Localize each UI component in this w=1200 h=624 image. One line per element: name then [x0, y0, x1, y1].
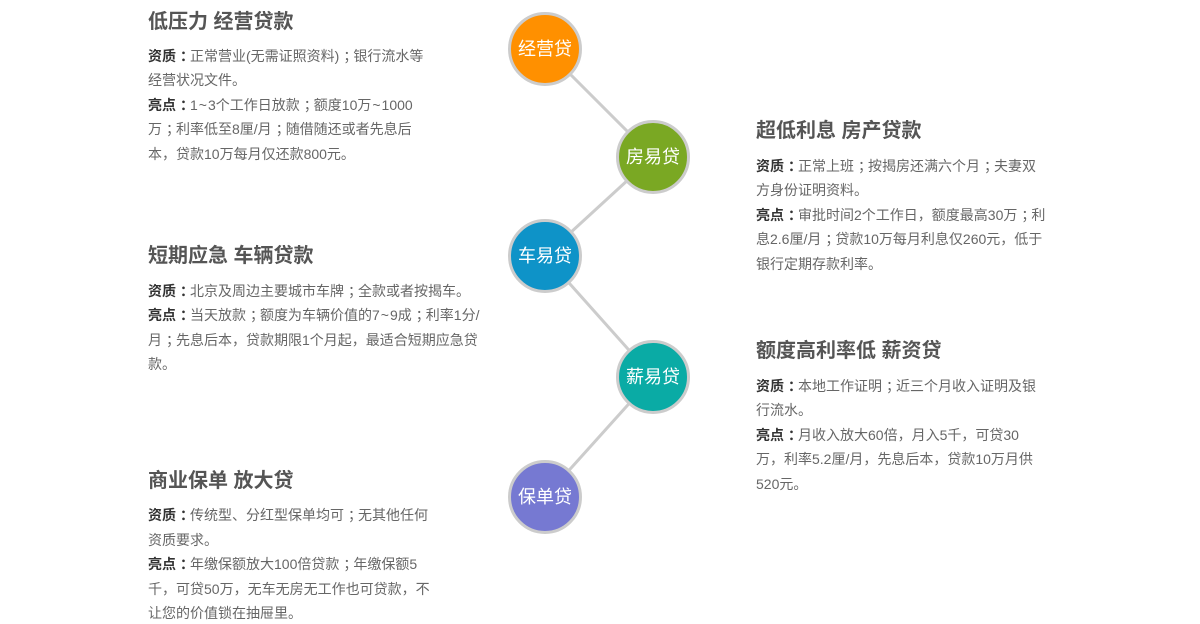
panel: 房产贷款 [756, 120, 1045, 272]
panel: 经营贷款: 资质 ：正常营业(无需证照资料) ；银行流水等 [148, 48, 423, 64]
panel: 房产贷款: 银行定期存款利率。 [756, 256, 882, 272]
node: 房易贷 [616, 120, 690, 194]
panel: 放大贷: 亮点 ：年缴保额放大100倍贷款 ；年缴保额5 [148, 556, 417, 572]
node: 保单贷 [508, 460, 582, 534]
panel: 薪资贷: 万，利率5.2厘/月，先息后本，贷款10万月供 [756, 451, 1033, 467]
panel: 房产贷款: 超低利息 房产贷款 [756, 120, 922, 142]
panel: 放大贷: 资质要求。 [148, 532, 218, 548]
panel: 房产贷款: 方身份证明资料。 [756, 182, 868, 198]
panel: 车辆贷款: 资质 ：北京及周边主要城市车牌 ；全款或者按揭车。 [148, 282, 470, 298]
node: 车易贷 [508, 219, 582, 293]
node: 经营贷: 经营贷 [518, 39, 572, 59]
panel: 薪资贷 [756, 340, 1036, 492]
panel: 放大贷: 千，可贷50万，无车无房无工作也可贷款，不 [148, 580, 430, 596]
node: 车易贷: 车易贷 [518, 246, 572, 266]
panel: 薪资贷: 520元。 [756, 476, 807, 492]
panel: 放大贷: 让您的价值锁在抽屉里。 [148, 605, 302, 621]
panel: 房产贷款: 亮点 ：审批时间2个工作日，额度最高30万 ；利 [756, 206, 1045, 222]
panel: 经营贷款: 本，贷款10万每月仅还款800元。 [148, 146, 355, 162]
panel: 车辆贷款: 短期应急 车辆贷款 [148, 245, 314, 267]
panel: 车辆贷款: 亮点 ：当天放款 ；额度为车辆价值的7~9成 ；利率1分/ [148, 307, 479, 323]
node: 薪易贷: 薪易贷 [626, 367, 680, 387]
node: 薪易贷 [616, 340, 690, 414]
panel: 经营贷款: 万 ；利率低至8厘/月 ；随借随还或者先息后 [148, 121, 412, 137]
panel: 经营贷款: 经营状况文件。 [148, 72, 246, 88]
node: 保单贷: 保单贷 [518, 487, 572, 507]
panel: 放大贷: 商业保单 放大贷 [148, 470, 294, 492]
node: 经营贷 [508, 12, 582, 86]
panel: 经营贷款 [148, 10, 423, 162]
panel: 薪资贷: 亮点 ：月收入放大60倍，月入5千，可贷30 [756, 426, 1019, 442]
panel: 房产贷款: 息2.6厘/月 ；贷款10万每月利息仅260元，低于 [756, 231, 1042, 247]
panel: 车辆贷款: 月 ；先息后本，贷款期限1个月起，最适合短期应急贷 [148, 332, 478, 348]
panel: 房产贷款: 资质 ：正常上班 ；按揭房还满六个月 ；夫妻双 [756, 158, 1036, 174]
panel: 薪资贷: 额度高利率低 薪资贷 [756, 340, 942, 362]
node: 房易贷: 房易贷 [626, 147, 680, 167]
panel: 车辆贷款 [148, 244, 480, 372]
panel: 经营贷款: 低压力 经营贷款 [148, 11, 294, 33]
panel: 车辆贷款: 款。 [148, 356, 176, 372]
panel: 放大贷 [148, 470, 430, 621]
panel: 放大贷: 资质 ：传统型、分红型保单均可 ；无其他任何 [148, 507, 428, 523]
panel: 经营贷款: 亮点 ：1~3个工作日放款 ；额度10万~1000 [148, 96, 413, 112]
panel: 薪资贷: 资质 ：本地工作证明 ；近三个月收入证明及银 [756, 378, 1036, 394]
panel: 薪资贷: 行流水。 [756, 402, 812, 418]
